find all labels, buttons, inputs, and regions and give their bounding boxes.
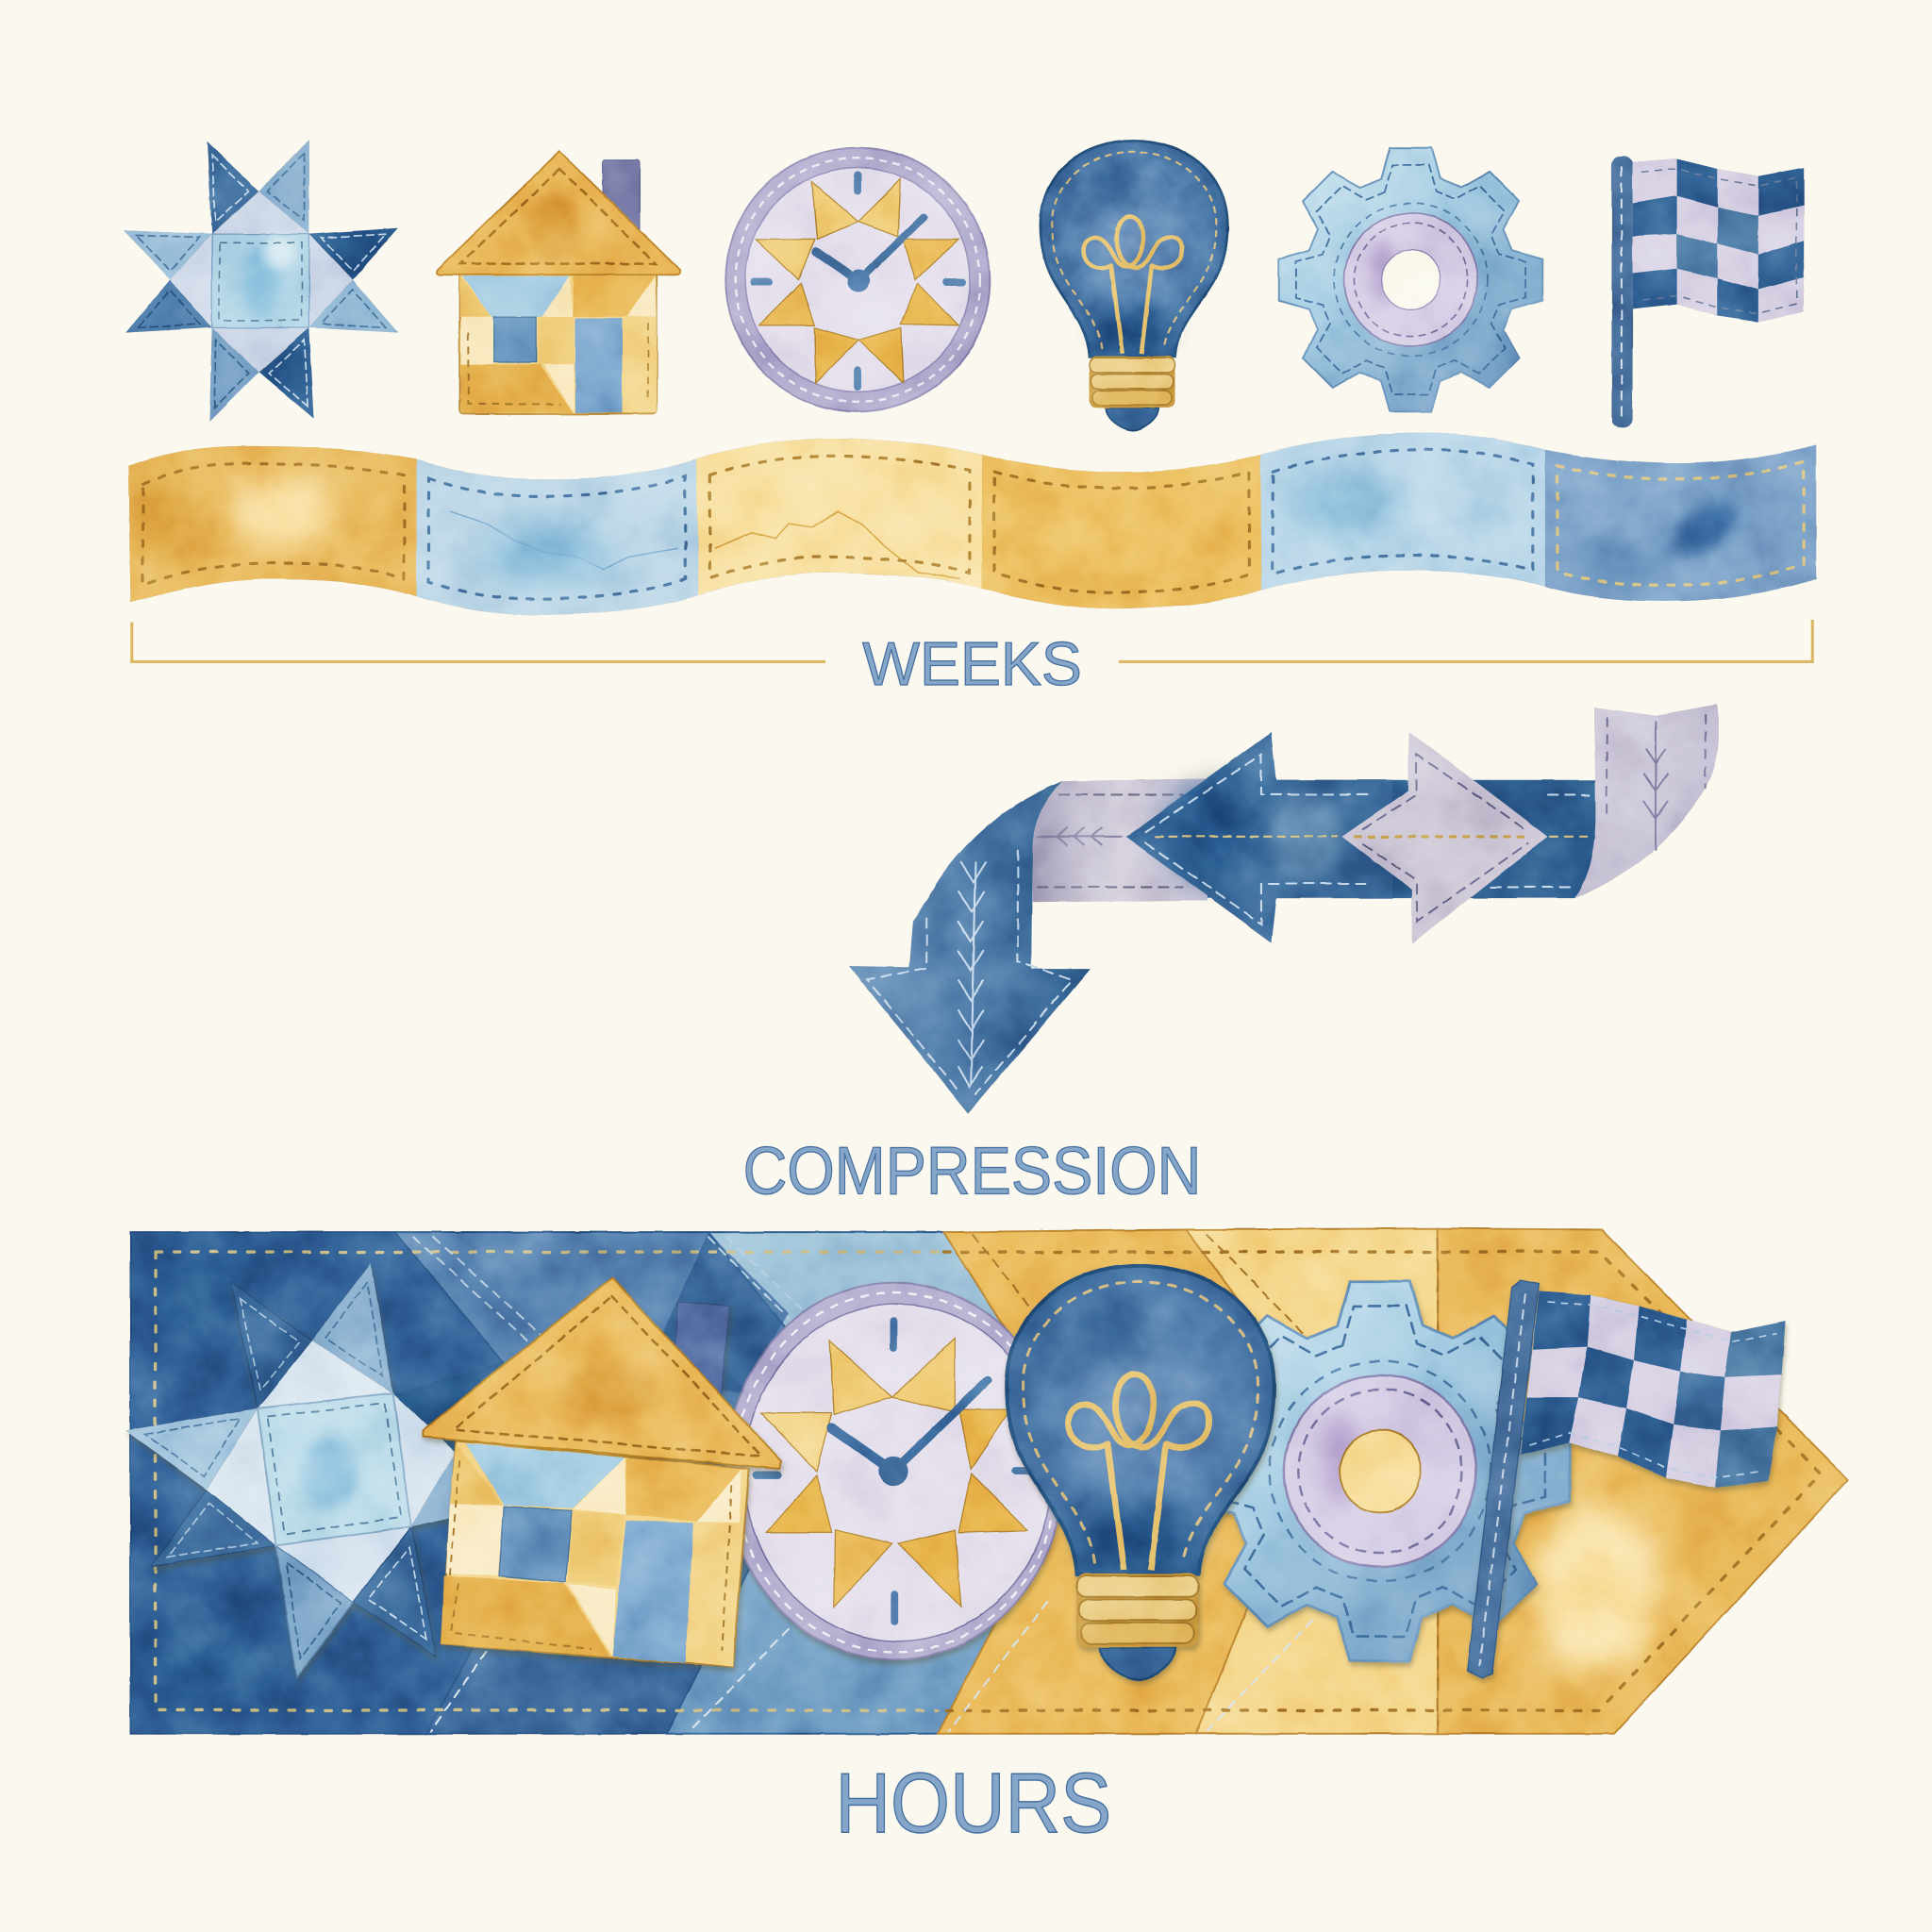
patch 5 xyxy=(1260,432,1545,591)
ribbon: navy band section xyxy=(1204,780,1597,898)
label: COMPRESSION: COMPRESSION xyxy=(743,1134,1201,1209)
arrow: right arrow stitching xyxy=(1356,754,1528,922)
arrow: left arrow stitching xyxy=(1146,754,1368,924)
icon: light bulb xyxy=(1041,141,1227,430)
icon: quilt house (compressed) xyxy=(423,1277,781,1667)
bracket: weeks span xyxy=(132,620,1812,661)
icon: checkered flag xyxy=(1611,157,1804,427)
panel base: patchwork background xyxy=(124,1228,1848,1734)
arrow: lavender right arrow xyxy=(1341,732,1547,943)
icon: light bulb (compressed) xyxy=(1007,1265,1274,1679)
patch 2 xyxy=(416,458,699,615)
icon: gear (compressed) xyxy=(1191,1281,1570,1661)
panel: compressed patchwork arrow xyxy=(124,1228,1848,1734)
label: WEEKS: WEEKS xyxy=(862,629,1082,698)
arrow: compression ribbon xyxy=(849,705,1719,1114)
icon: checkered flag (compressed) xyxy=(1468,1280,1786,1678)
label: HOURS: HOURS xyxy=(836,1756,1111,1851)
icon: quilt clock xyxy=(725,148,990,411)
icon: quilt star (compressed) xyxy=(125,1263,506,1678)
arrow: down arrow stitching xyxy=(868,850,1072,1094)
patch 4 xyxy=(982,455,1261,608)
patch 6 xyxy=(1545,445,1816,601)
arrow: band stitching xyxy=(1038,794,1592,887)
ribbon: tail stitching xyxy=(1607,715,1706,850)
panel: patchwork timeline ribbon xyxy=(128,432,1816,615)
ribbon: lavender band section xyxy=(1033,778,1208,902)
patch 3 xyxy=(696,439,982,595)
top row of quilted icons xyxy=(124,140,1804,430)
icon: gear xyxy=(1279,148,1542,411)
icon: quilt house xyxy=(437,152,680,414)
icon: clock (compressed) xyxy=(725,1283,1063,1659)
arrow: navy left arrow xyxy=(1126,732,1392,942)
ribbon: lavender upturned tail xyxy=(1574,705,1719,898)
arrow: large down arrow xyxy=(849,781,1091,1114)
patch 1 xyxy=(128,446,416,603)
icon: quilt star xyxy=(124,140,398,422)
